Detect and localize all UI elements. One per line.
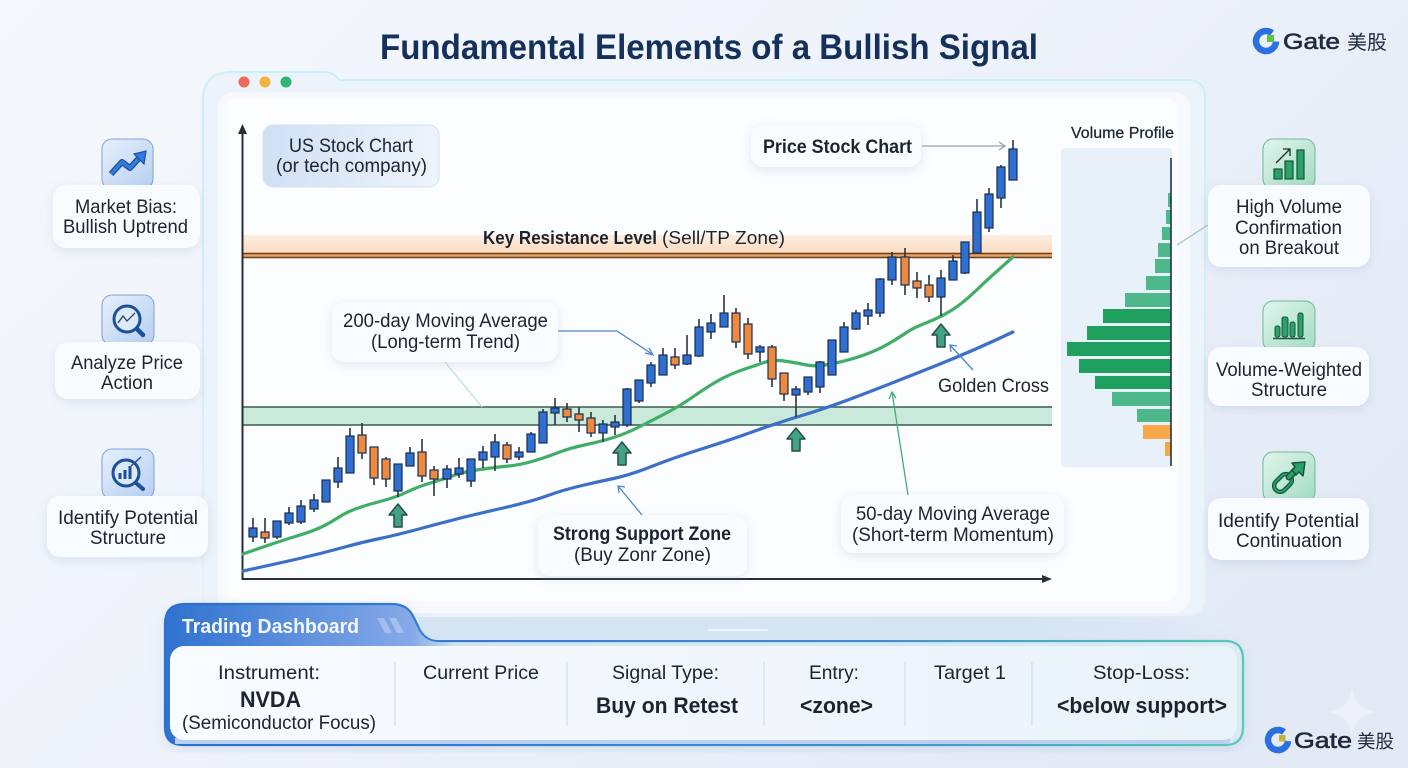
axes <box>238 124 1052 583</box>
panel: left item Analyze Price Action: Analyze Price <box>71 352 183 374</box>
panel: right item High Volume: Confirmation <box>1235 217 1342 239</box>
panel: right item Volume-Weighted Structure: Structure <box>1251 379 1327 401</box>
label: Strong Support Zone: (Buy Zonr Zone) <box>574 544 711 566</box>
tab stripes <box>377 618 404 633</box>
label: US Stock Chart: (or tech company) <box>276 155 427 177</box>
panel: left item Analyze Price Action: Action <box>101 372 153 394</box>
icon: volume bars <box>1263 301 1315 351</box>
panel: left item Identify Potential Structure: Structure <box>90 527 166 549</box>
icon: trend arrow <box>102 139 153 189</box>
panel: right item Volume-Weighted Structure: Volume-Weighted <box>1216 359 1362 381</box>
panel: left item Identify Potential Structure <box>47 449 208 557</box>
label: 50-day Moving Average: 50-day Moving Average <box>856 503 1050 525</box>
panel: right item High Volume: High Volume <box>1236 196 1342 218</box>
field: Instrument: Instrument: <box>218 662 320 684</box>
panel: trading dashboard <box>165 604 1243 745</box>
logo: Gate bottom <box>1268 728 1394 753</box>
panel: right item Identify Potential Continuation: Identify Potential <box>1218 510 1359 532</box>
label: 200-day Moving Average: (Long-term Trend) <box>371 331 520 353</box>
label: US Stock Chart <box>263 125 439 187</box>
200-day moving average line <box>243 332 1013 571</box>
support zone <box>243 407 1052 425</box>
field: Instrument: NVDA <box>240 687 301 712</box>
panel: right item Volume-Weighted Structure <box>1208 301 1369 406</box>
field: Signal Type <box>596 662 739 718</box>
panel: left item Market Bias <box>53 139 200 248</box>
label: Price Stock Chart: Price Stock Chart <box>763 137 913 158</box>
label: Golden Cross <box>938 345 1049 397</box>
icon: chain arrow <box>1263 452 1315 502</box>
field: Target 1: Target 1 <box>934 662 1006 684</box>
window controls <box>238 76 292 88</box>
volume heading: Volume Profile <box>1071 125 1174 142</box>
label: 50-day Moving Average <box>841 392 1064 553</box>
label: Golden Cross: Golden Cross <box>938 375 1049 397</box>
logo: Gate top: 美股 <box>1347 32 1387 54</box>
resistance zone <box>243 235 1052 258</box>
panel: right item Identify Potential Continuation <box>1208 452 1369 560</box>
logo: Gate top <box>1256 29 1387 54</box>
label: 50-day Moving Average: (Short-term Momentum) <box>852 524 1054 546</box>
icon: sparkle <box>1328 688 1376 736</box>
50-day moving average line <box>243 257 1013 554</box>
label: Key Resistance Level: Key Resistance Level <box>483 227 657 248</box>
logo: Gate bottom: 美股 <box>1357 731 1394 752</box>
dashboard heading: Trading Dashboard <box>182 616 359 638</box>
panel: left item Identify Potential Structure: Identify Potential <box>58 507 198 529</box>
panel: left item Market Bias: Market Bias: <box>75 196 177 218</box>
label: Key Resistance Level: (Sell/TP Zone) <box>662 227 785 248</box>
panel: left item Market Bias: Bullish Uptrend <box>63 216 188 238</box>
field: Stop-Loss <box>1057 662 1227 718</box>
icon: magnifier with chart <box>102 295 154 345</box>
logo: Gate bottom: Gate <box>1294 728 1352 753</box>
panel: right item High Volume <box>1208 139 1370 267</box>
field: Entry: Entry: <box>809 662 859 684</box>
panel: right item Identify Potential Continuation: Continuation <box>1236 530 1342 552</box>
field: Instrument: (Semiconductor Focus) <box>182 712 376 734</box>
logo: Gate top: Gate <box>1283 29 1340 54</box>
title: Fundamental Elements of a Bullish Signal <box>380 28 1038 67</box>
label: 200-day Moving Average <box>332 302 653 407</box>
candlesticks <box>249 140 1017 543</box>
field: Stop-Loss: <below support> <box>1057 693 1227 718</box>
field: Instrument <box>182 662 376 734</box>
icon: rising bars <box>1263 139 1315 189</box>
label: Price Stock Chart <box>751 125 1005 167</box>
icon: magnifier with bars <box>102 449 154 499</box>
field: Current Price: Current Price <box>423 662 539 684</box>
field: Entry <box>800 662 873 718</box>
panel: left item Analyze Price Action <box>55 295 200 399</box>
label: 200-day Moving Average: 200-day Moving Average <box>343 310 548 332</box>
volume profile <box>1061 125 1208 467</box>
field: Signal Type: Signal Type: <box>612 662 719 684</box>
label: Strong Support Zone: Strong Support Zone <box>553 523 731 545</box>
signal arrows <box>389 324 950 527</box>
field: Entry: <zone> <box>800 693 873 718</box>
label: US Stock Chart: US Stock Chart <box>289 135 414 157</box>
panel: chart window <box>203 72 1205 615</box>
panel: right item High Volume: on Breakout <box>1239 237 1340 259</box>
upper dashboard sheen <box>418 617 1230 640</box>
field: Signal Type: Buy on Retest <box>596 693 739 718</box>
field: Stop-Loss: Stop-Loss: <box>1093 662 1190 684</box>
label: Key Resistance Level <box>483 227 785 248</box>
label: Strong Support Zone <box>538 486 747 576</box>
